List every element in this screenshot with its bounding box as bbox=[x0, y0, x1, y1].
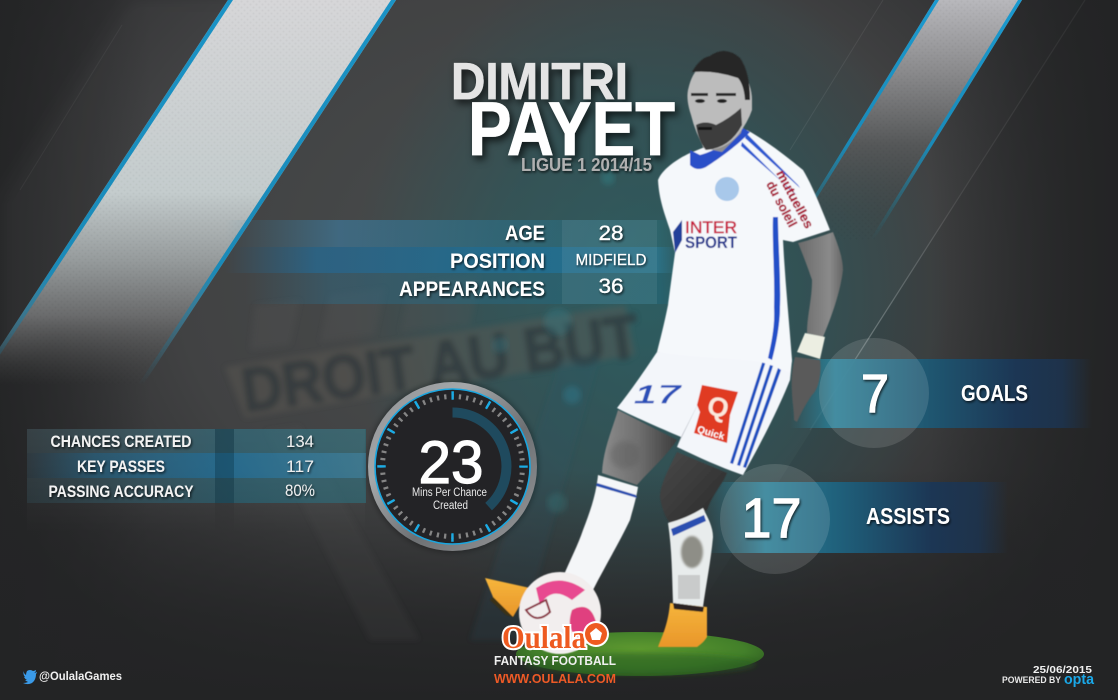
sponsor: quick: Quick bbox=[696, 424, 726, 443]
strapline: FANTASY FOOTBALL bbox=[494, 654, 616, 668]
twitter handle: @OulalaGames bbox=[39, 669, 122, 683]
subtitle: competition: LIGUE 1 2014/15 bbox=[521, 155, 652, 175]
value: appearances: 36 bbox=[598, 275, 624, 298]
grass base bbox=[516, 632, 764, 676]
club crest watermark: DROIT AU BUT bbox=[237, 302, 643, 426]
gauge: mins per chance created: 23 bbox=[418, 429, 484, 496]
gauge: mins per chance created bbox=[366, 380, 538, 552]
label: appearances: APPEARANCES bbox=[399, 278, 545, 301]
stat bar: goals: 7 bbox=[861, 364, 889, 424]
back leg bbox=[658, 452, 727, 647]
sponsor: quick: Q bbox=[704, 390, 732, 424]
sleeve sponsor text: mutuelles bbox=[773, 167, 817, 231]
diagonal band: right bbox=[787, 0, 1022, 240]
value: age: 28 bbox=[598, 222, 624, 245]
gauge: mins per chance created: Mins Per Chance bbox=[412, 487, 487, 499]
date and data credit bbox=[1002, 664, 1095, 688]
oulala wordmark: Oulala bbox=[502, 619, 586, 655]
label: passing accuracy: PASSING ACCURACY bbox=[48, 482, 194, 501]
value: position: MIDFIELD bbox=[576, 252, 646, 269]
value: key passes: 117 bbox=[286, 457, 314, 476]
stat bar: assists bbox=[705, 464, 1008, 574]
sponsor: intersport: INTER bbox=[685, 218, 737, 237]
gauge: mins per chance created: Created bbox=[433, 500, 468, 512]
sleeve sponsor text: du soleil bbox=[763, 178, 800, 230]
shorts number: 17 bbox=[634, 381, 682, 409]
date and data credit: POWERED BY bbox=[1002, 675, 1062, 686]
icon: football bbox=[583, 621, 609, 647]
label: key passes: KEY PASSES bbox=[77, 457, 165, 476]
panel: player info table bbox=[225, 220, 680, 304]
sponsor: quick bbox=[694, 385, 738, 443]
stat bar: assists: ASSISTS bbox=[866, 503, 950, 529]
panel: creativity table bbox=[27, 429, 366, 534]
diagonal band: left bbox=[0, 0, 396, 385]
label: chances created: CHANCES CREATED bbox=[50, 432, 192, 451]
logo: oulala fantasy football bbox=[494, 619, 616, 686]
title: player first name: DIMITRI bbox=[451, 53, 628, 111]
label: age: AGE bbox=[505, 222, 545, 245]
thin diagonal lines bbox=[0, 0, 1085, 430]
label: position: POSITION bbox=[450, 250, 545, 273]
date and data credit: 25/06/2015 bbox=[1033, 664, 1092, 676]
arm bbox=[792, 232, 843, 422]
stat bar: assists: 17 bbox=[742, 486, 802, 549]
match ball bbox=[519, 572, 601, 654]
stat bar: goals: GOALS bbox=[961, 380, 1028, 406]
front leg bbox=[485, 410, 677, 617]
website: WWW.OULALA.COM bbox=[494, 671, 616, 686]
club crest watermark bbox=[225, 171, 643, 640]
logo: opta: opta bbox=[1064, 671, 1095, 688]
shorts bbox=[617, 352, 792, 475]
value: passing accuracy: 80% bbox=[285, 481, 315, 500]
player photo illustration bbox=[485, 51, 843, 654]
value: chances created: 134 bbox=[286, 432, 314, 451]
head bbox=[687, 51, 752, 152]
title: player surname: PAYET bbox=[468, 87, 675, 172]
sponsor: intersport: SPORT bbox=[685, 233, 738, 252]
sponsor: intersport bbox=[673, 218, 738, 253]
stat bar: goals bbox=[790, 338, 1092, 448]
icon: twitter bird bbox=[23, 670, 37, 684]
shirt crest bbox=[715, 177, 739, 201]
shirt bbox=[657, 128, 830, 373]
